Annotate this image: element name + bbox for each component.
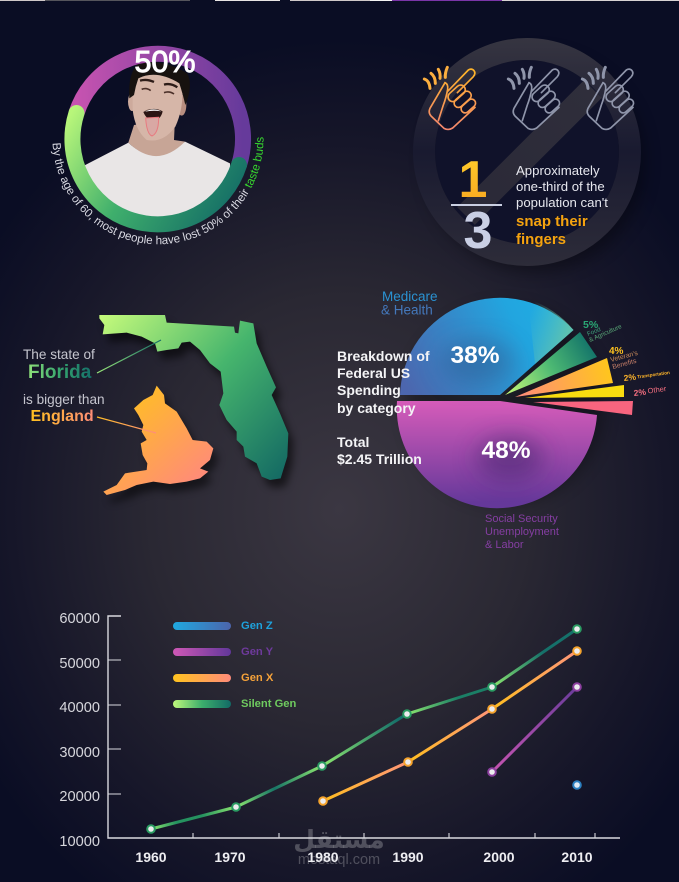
x axis labels: 1980 — [307, 849, 339, 865]
watermark — [293, 826, 385, 868]
label: Medicare: & Health — [381, 302, 433, 318]
legend: Gen Z — [241, 620, 273, 632]
legend: Gen X — [241, 672, 274, 684]
icon: grey hand — [582, 67, 635, 129]
label: Medicare — [381, 289, 438, 318]
text: breakdown heading: by category — [337, 400, 416, 416]
number shade — [442, 340, 514, 384]
label: 5% Food & Agriculture: Food — [586, 326, 602, 338]
label: 4% Veteran's Benefits — [609, 346, 639, 371]
ring: green arc — [72, 113, 239, 224]
y axis labels: 20000 — [59, 789, 100, 805]
fraction: one third: 3 — [464, 202, 492, 260]
percent: 38%: 38% — [450, 342, 500, 369]
panel: finger snap — [424, 49, 645, 272]
map shadow: England — [108, 394, 218, 503]
label: 4% Veteran's Benefits: Benefits — [612, 358, 638, 371]
label: Social Security: Unemployment — [485, 526, 559, 538]
text: snap description: snap their — [516, 213, 588, 230]
line: Silent Gen — [151, 629, 577, 829]
slice: Food & Agriculture 5% — [505, 332, 597, 395]
label: 2% Other: Other — [647, 384, 667, 395]
text: snap description: one-third of the — [516, 179, 605, 194]
slice: Other 2% — [533, 401, 633, 415]
text: Florida label: The state of — [23, 347, 95, 362]
legend — [173, 620, 296, 710]
text: Florida label: Florida — [28, 362, 92, 383]
label: 2% Other — [633, 384, 667, 398]
text: England label — [23, 392, 105, 425]
label: Social Security: Social Security — [485, 513, 558, 525]
legend: Silent Gen — [241, 698, 296, 710]
label: Social Security — [485, 513, 559, 551]
text: breakdown heading: Spending — [337, 382, 401, 398]
panel: Florida vs England — [23, 315, 293, 503]
line: Gen X — [323, 651, 577, 801]
text: snap description: Approximately — [516, 163, 600, 178]
text: England label: is bigger than — [23, 392, 105, 407]
slice: Veteran's Benefits 4% — [515, 358, 613, 397]
map: Florida — [99, 315, 288, 480]
slice: Medicare teal tip — [528, 299, 574, 364]
text: breakdown heading: Breakdown of — [337, 348, 430, 364]
slice: Social Security 48% — [397, 401, 597, 508]
x axis labels: 2000 — [483, 849, 515, 865]
curved caption: By the age of 60, most people have lost 50% of their taste buds — [50, 137, 264, 245]
label: 2% Transportation: Transportation — [637, 370, 670, 379]
y axis labels: 40000 — [59, 700, 100, 716]
label: 4% Veteran's Benefits: 4% — [609, 346, 624, 357]
label: Social Security: & Labor — [485, 539, 524, 551]
y axis labels: 60000 — [59, 611, 100, 627]
y axis labels: 30000 — [59, 745, 100, 761]
cropped strip at top edge — [0, 0, 679, 1]
points: Gen X — [319, 647, 581, 805]
label: Medicare: Medicare — [382, 289, 438, 304]
icon: grey hand — [508, 67, 561, 129]
watermark: mostaql.com — [298, 852, 380, 868]
leader line: England — [97, 417, 156, 433]
y axis and x axis — [108, 616, 620, 838]
pie shadow — [405, 305, 605, 505]
label: 2% Transportation — [623, 370, 670, 383]
label: 4% Veteran's Benefits: Veteran's — [610, 350, 639, 364]
portrait photo of man with tongue out — [85, 62, 230, 216]
text: snap description: fingers — [516, 231, 566, 248]
prohibition sign — [424, 49, 645, 272]
number shade — [476, 436, 544, 480]
x axis labels: 1970 — [214, 849, 246, 865]
x axis labels: 1990 — [392, 849, 424, 865]
text: England label: England — [30, 408, 94, 425]
y axis labels — [59, 611, 100, 850]
icon: orange snapping hand — [424, 67, 477, 129]
watermark: مستقل — [293, 826, 385, 854]
percent: 48%: 48% — [481, 437, 531, 464]
slice: Transportation 2% — [525, 385, 624, 398]
line: Gen Y — [492, 687, 577, 772]
heading: 50%: 50% — [134, 45, 196, 79]
x axis labels: 2010 — [561, 849, 593, 865]
text: breakdown heading — [337, 348, 430, 467]
panel: line chart — [59, 611, 620, 865]
y axis labels: 50000 — [59, 656, 100, 672]
leader line: Florida — [97, 340, 161, 373]
point: Gen Z — [573, 781, 581, 789]
map: England — [103, 386, 213, 495]
y axis labels: 10000 — [59, 834, 100, 850]
legend: Gen Y — [241, 646, 274, 658]
text: breakdown heading: Federal US — [337, 365, 410, 381]
panel: federal spending pie chart — [337, 289, 670, 551]
fraction: one third: 1 — [459, 151, 487, 209]
label: 5% Food & Agriculture: 5% — [583, 319, 599, 331]
text: snap description: population can't — [516, 195, 608, 210]
ring: purple arc — [76, 54, 243, 165]
label: 2% Transportation: 2% — [623, 372, 637, 383]
points: Gen Y — [488, 683, 581, 776]
label: 2% Other: 2% — [633, 387, 647, 398]
text: breakdown heading: $2.45 Trillion — [337, 451, 422, 467]
panel: taste buds ring — [50, 45, 264, 245]
x axis labels: 1960 — [135, 849, 167, 865]
map shadow: Florida — [104, 323, 293, 488]
label: 5% Food & Agriculture: & Agriculture — [588, 323, 623, 344]
fraction: one third — [451, 151, 502, 260]
slice: Medicare 38% — [400, 298, 574, 395]
x axis labels — [135, 849, 593, 865]
text: breakdown heading: Total — [337, 434, 369, 450]
text: snap description — [516, 163, 608, 248]
text: Florida label — [23, 347, 95, 383]
points: Silent Gen — [147, 625, 581, 833]
